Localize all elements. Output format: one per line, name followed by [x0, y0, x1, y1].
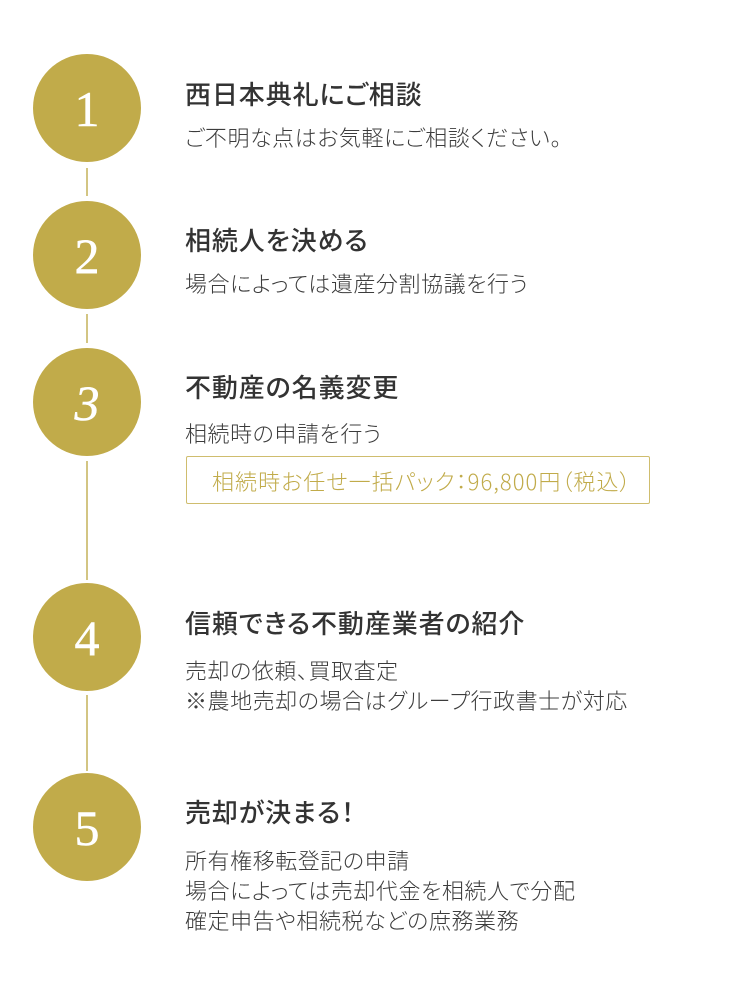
step 2 number: 2	[74, 228, 100, 284]
connector 2-3	[86, 314, 88, 343]
connector 1-2	[86, 168, 88, 196]
step 3 text: 相続時の申請を行う	[185, 417, 382, 449]
step 4 heading: 信頼できる不動産業者の紹介	[185, 604, 525, 641]
step 5 number	[33, 773, 141, 881]
step 5 text: 所有権移転登記の申請	[185, 844, 410, 876]
step 2 heading: 相続人を決める	[185, 221, 368, 258]
step 5 number: 5	[74, 800, 100, 856]
step 1 heading: 西日本典礼にご相談	[185, 75, 423, 112]
step 3 heading: 不動産の名義変更	[185, 368, 399, 405]
step 5 text	[185, 844, 576, 936]
connector 3-4	[86, 461, 88, 580]
step 1 text: ご不明な点はお気軽にご相談ください。	[185, 121, 562, 153]
step 5 heading: 売却が決まる！	[185, 793, 355, 830]
step 5 text: 確定申告や相続税などの庶務業務	[185, 904, 519, 936]
step 3 number	[33, 348, 141, 456]
step 4 text: 売却の依頼、買取査定	[185, 654, 399, 686]
step 5 text: 場合によっては売却代金を相続人で分配	[185, 874, 576, 906]
step 2 text: 場合によっては遺産分割協議を行う	[185, 267, 528, 299]
price box: 相続時お任せ一括パック：96,800円（税込）	[212, 465, 632, 497]
price box	[186, 456, 650, 504]
step 1 number: 1	[74, 81, 100, 137]
step 4 text	[185, 654, 628, 716]
step 2 number	[33, 200, 141, 308]
step 4 number	[33, 583, 141, 691]
step 4 text: ※農地売却の場合はグループ行政書士が対応	[185, 684, 628, 716]
step 3 number: 3	[74, 375, 100, 431]
step 4 number: 4	[74, 610, 100, 666]
step 1 number	[33, 54, 141, 162]
connector 4-5	[86, 695, 88, 771]
